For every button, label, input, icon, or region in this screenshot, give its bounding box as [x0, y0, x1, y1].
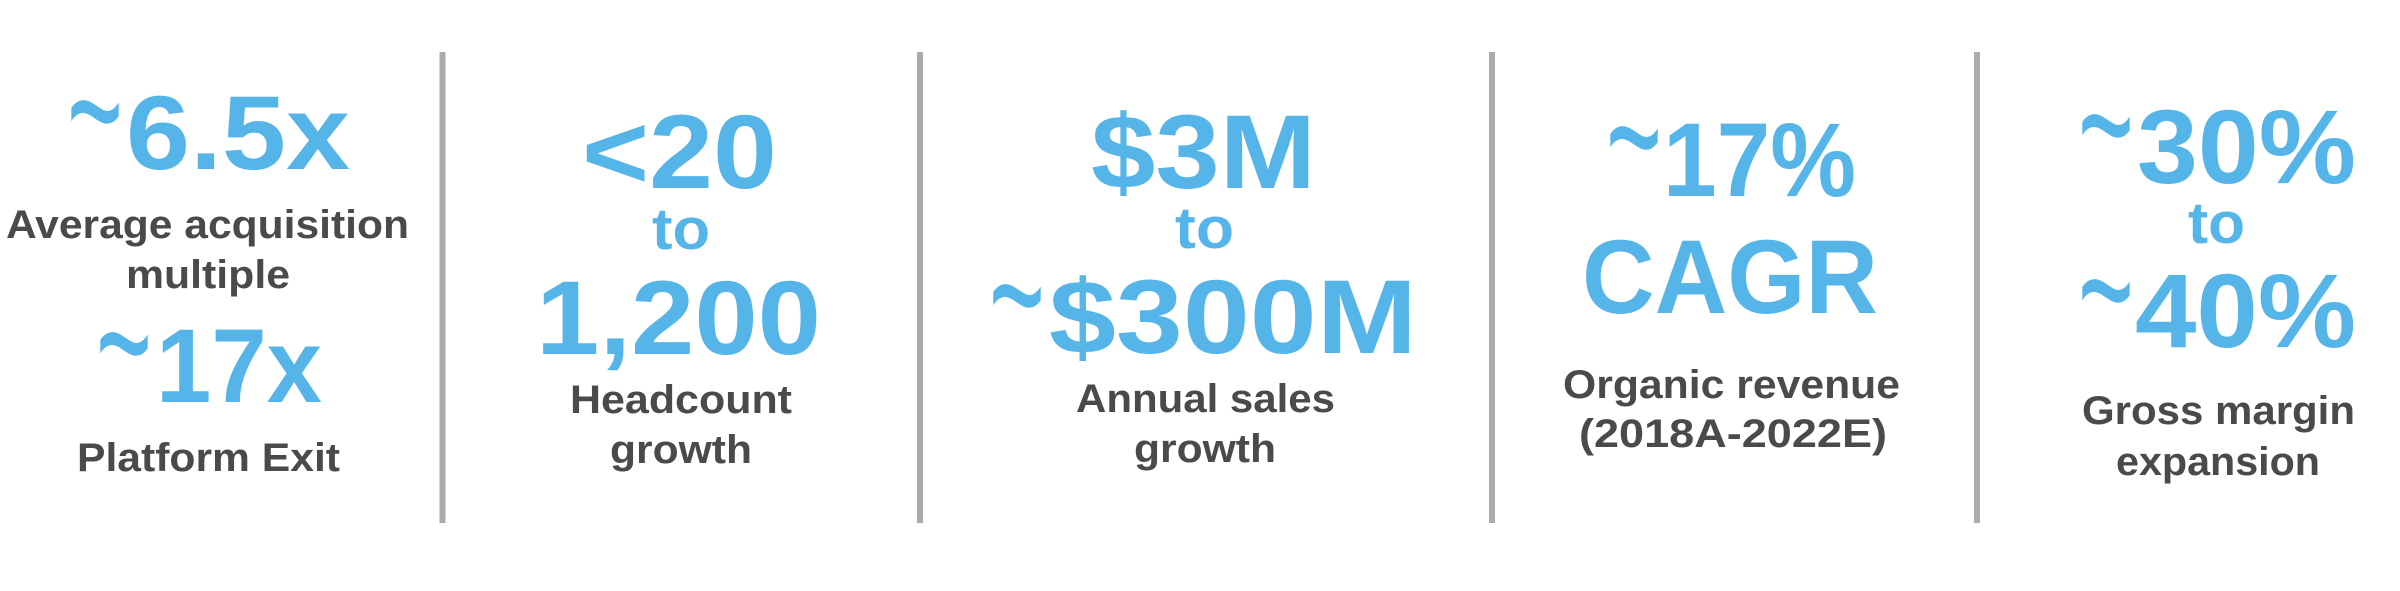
tilde for 17x: ~ [96, 236, 152, 448]
stat: CAGR: CAGR [1582, 219, 1878, 336]
stat: 1,200: 1,200 [536, 260, 821, 377]
label: average acquisition: Average acquisition [6, 203, 409, 247]
tilde for $300M: ~ [989, 188, 1045, 400]
label: organic revenue: Organic revenue [1563, 363, 1900, 407]
label: annual sales: Annual sales [1076, 377, 1335, 421]
panel: organic revenue CAGR [1563, 30, 1900, 456]
tilde for 17%: ~ [1606, 30, 1662, 242]
stat: $300M: $300M [1049, 259, 1417, 376]
panel: annual sales growth [989, 94, 1417, 471]
connector: to: to [652, 197, 710, 262]
tilde for 6.5x: ~ [67, 4, 123, 216]
stat: 17x: 17x [156, 308, 322, 425]
connector: to: to [2188, 191, 2245, 256]
label: gross margin: Gross margin [2082, 389, 2355, 433]
panel: acquisition multiple [6, 4, 409, 480]
stat: 17%: 17% [1663, 102, 1856, 219]
stat: 30%: 30% [2137, 89, 2356, 206]
label: growth: growth [610, 428, 752, 472]
stat: 40%: 40% [2135, 253, 2356, 370]
panel: gross margin expansion [2078, 18, 2356, 484]
label: headcount: Headcount [570, 378, 792, 422]
label: growth: growth [1134, 427, 1276, 471]
stat: 6.5x: 6.5x [126, 75, 350, 192]
tilde for 40%: ~ [2078, 183, 2134, 395]
tilde for 30%: ~ [2078, 18, 2134, 230]
label: multiple: multiple [126, 253, 290, 297]
label: platform exit: Platform Exit [77, 436, 340, 480]
stat: under 20: <20 [582, 94, 777, 211]
label: expansion: expansion [2116, 440, 2320, 484]
label: 2018A-2022E: (2018A-2022E) [1579, 412, 1887, 456]
connector: to: to [1175, 196, 1234, 261]
panel: headcount growth [536, 94, 821, 472]
stat: $3M: $3M [1091, 94, 1316, 211]
